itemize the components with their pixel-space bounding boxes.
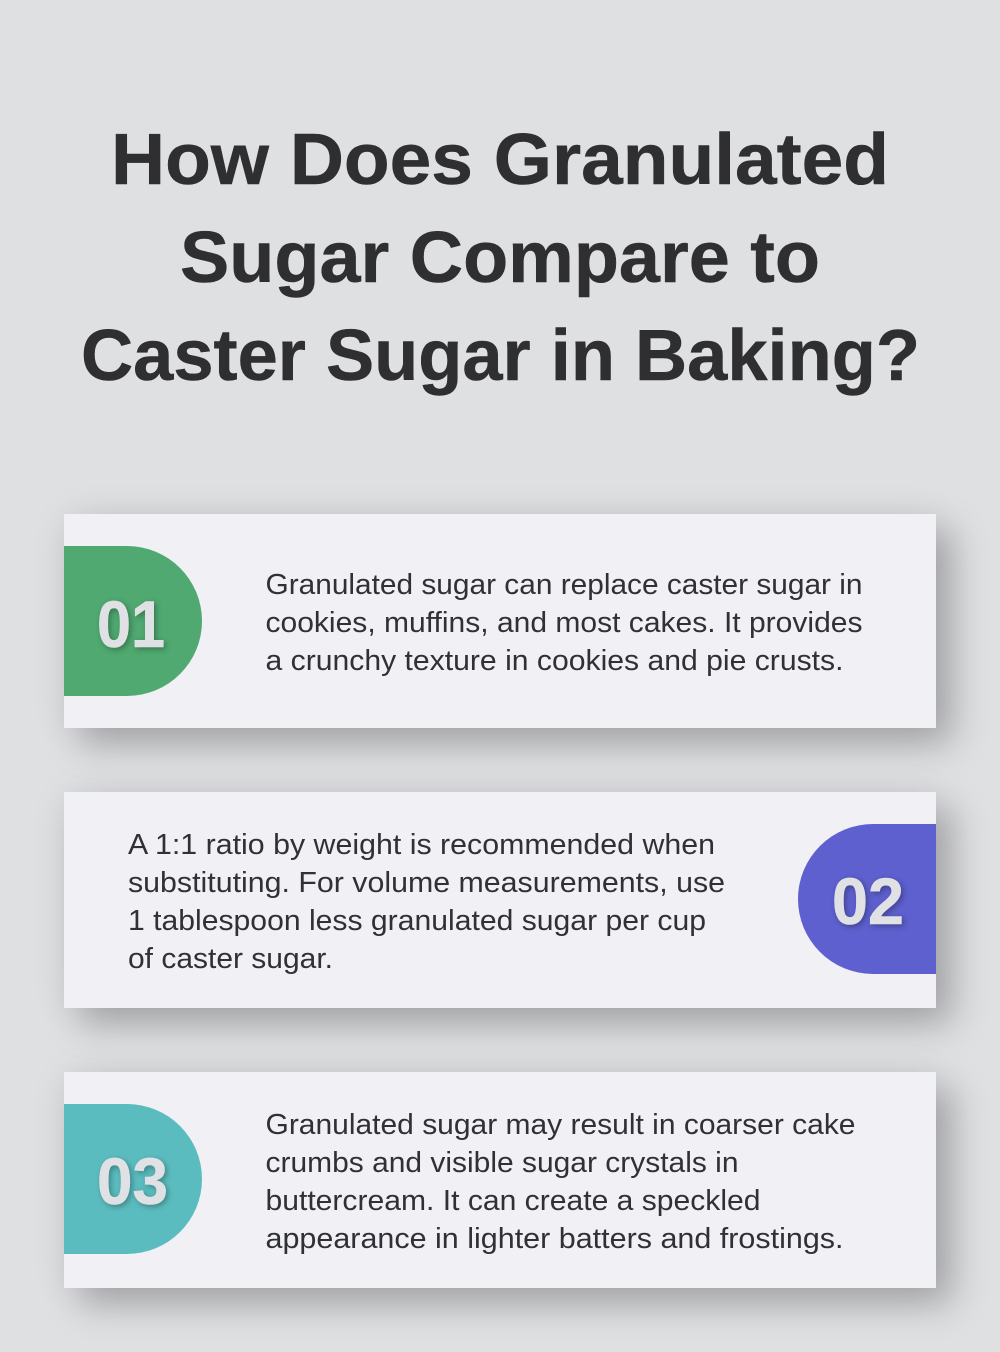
text block: card 03: buttercream. It can create a speckled (266, 1185, 760, 1217)
text block: card 01: a crunchy texture in cookies and pie crusts. (266, 645, 844, 677)
text block: card 02: A 1:1 ratio by weight is recommended when (128, 829, 715, 861)
text block: card 02 (128, 829, 725, 975)
text block: card 01: Granulated sugar can replace caster sugar in (266, 569, 862, 601)
text block: card 02: of caster sugar. (128, 943, 333, 975)
icon: number badge 03: 03 (97, 1144, 168, 1218)
icon: number badge 01 (64, 546, 202, 696)
text block: card 01 (266, 569, 863, 677)
text block: card 01: cookies, muffins, and most cakes. It provides (266, 607, 863, 639)
panel: card 01 (64, 514, 936, 728)
icon: number badge 02: 02 (832, 864, 904, 938)
icon: number badge 01: 01 (97, 587, 165, 661)
text block: card 03 (266, 1109, 856, 1255)
icon: number badge 03 (64, 1104, 202, 1254)
title: How Does Granulated (111, 120, 889, 200)
title: Sugar Compare to (180, 218, 820, 298)
title (81, 120, 920, 396)
panel: card 02 (64, 792, 936, 1008)
panel: card 03 (64, 1072, 936, 1288)
text block: card 02: substituting. For volume measurements, use (128, 867, 725, 899)
title: Caster Sugar in Baking? (81, 316, 920, 396)
text block: card 02: 1 tablespoon less granulated sugar per cup (128, 905, 706, 937)
text block: card 03: Granulated sugar may result in coarser cake (266, 1109, 856, 1141)
icon: number badge 02 (798, 824, 936, 974)
text block: card 03: crumbs and visible sugar crystals in (266, 1147, 738, 1179)
text block: card 03: appearance in lighter batters and frostings. (266, 1223, 844, 1255)
